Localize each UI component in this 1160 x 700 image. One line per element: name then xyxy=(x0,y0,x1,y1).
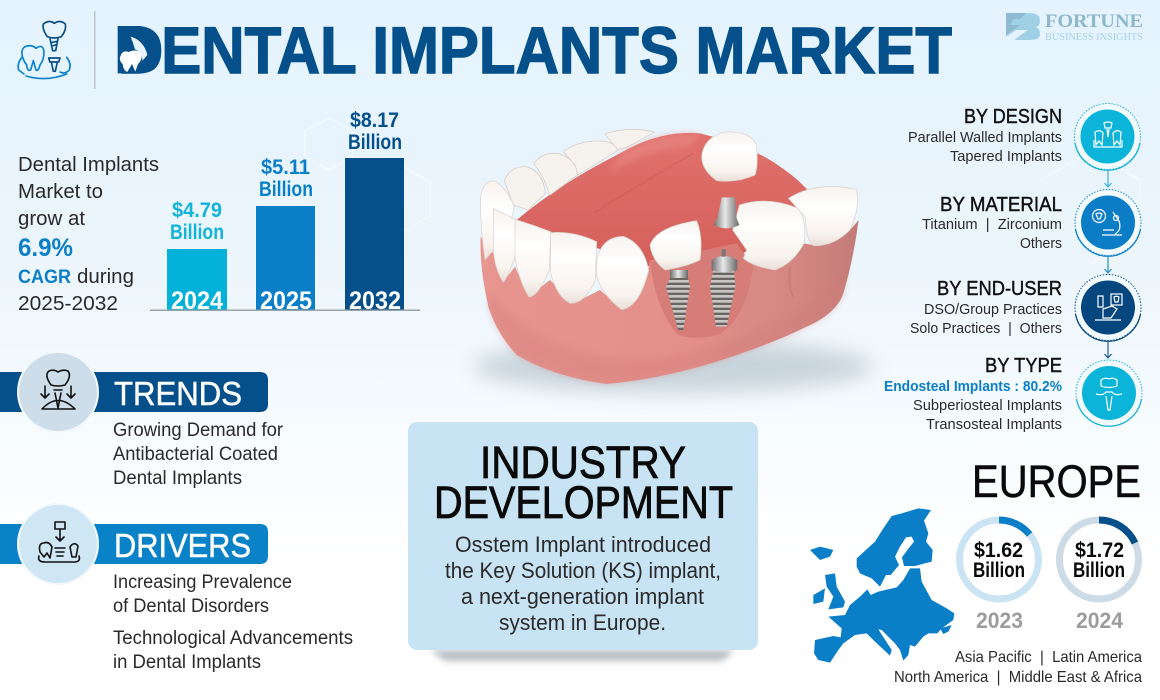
front teeth xyxy=(481,181,857,310)
gums xyxy=(480,220,859,384)
text block: market growth: 2025-2032 xyxy=(18,293,118,315)
panel: trends: Growing Demand for xyxy=(113,420,284,441)
donut: 2024: Billion xyxy=(1073,559,1125,582)
bar 2024: $4.79 xyxy=(172,199,222,222)
bar 2024: Billion xyxy=(170,221,224,244)
text block: market growth: Dental Implants xyxy=(18,154,159,176)
icon: by end-user badge xyxy=(1075,274,1141,341)
bar 2024 xyxy=(167,199,227,315)
bar 2025 xyxy=(256,156,315,315)
text block: market growth: during xyxy=(77,266,134,288)
segment: by material xyxy=(922,194,1062,252)
segment: by material: Titanium | Zirconium xyxy=(922,216,1062,233)
segment: by material: BY MATERIAL xyxy=(940,194,1062,216)
panel: trends xyxy=(0,352,284,489)
right molars xyxy=(788,186,857,246)
panel: drivers: of Dental Disorders xyxy=(113,596,269,617)
arrow xyxy=(1104,170,1112,187)
text block: market growth: CAGR xyxy=(18,267,71,288)
icon: by type badge xyxy=(1076,360,1142,426)
panel: drivers: Increasing Prevalence xyxy=(113,572,292,593)
text block: other regions: Asia Pacific | Latin America xyxy=(955,649,1142,666)
panel: trends: TRENDS xyxy=(114,375,242,412)
panel: drivers: in Dental Implants xyxy=(113,652,261,673)
segment: by end-user: Solo Practices | Others xyxy=(910,320,1062,337)
panel: trends: Antibacterial Coated xyxy=(113,444,278,465)
panel: drivers: DRIVERS xyxy=(114,527,251,564)
text block: other regions xyxy=(894,649,1142,686)
donut: 2023 xyxy=(960,520,1038,633)
title: DENTAL IMPLANTS MARKET xyxy=(118,13,952,87)
segment: by type: BY TYPE xyxy=(985,355,1062,377)
icon: dental implant logo xyxy=(18,21,70,79)
icon: crown on implant xyxy=(18,352,98,432)
bar 2025: 2025 xyxy=(260,287,312,315)
text block: market growth xyxy=(18,154,159,315)
panel: industry development: Osstem Implant introduced xyxy=(455,532,711,557)
segment: by type xyxy=(884,355,1062,433)
donut: 2024: $1.72 xyxy=(1075,539,1124,562)
icon: by design badge xyxy=(1074,104,1140,170)
panel: drivers: Technological Advancements xyxy=(113,628,353,649)
back teeth xyxy=(504,129,655,210)
logo: Fortune Business Insights: BUSINESS INSIGHTS xyxy=(1045,32,1143,43)
map: europe xyxy=(810,508,954,663)
donut: 2023: 2023 xyxy=(976,608,1023,633)
segment: by design: Tapered Implants xyxy=(950,148,1062,165)
text block: market growth: Market to xyxy=(18,181,103,203)
segment: by type: Subperiosteal Implants xyxy=(913,397,1062,414)
bar chart xyxy=(150,109,420,315)
text block: market growth: 6.9% xyxy=(18,234,73,262)
illustration: dental implant jaw xyxy=(473,129,873,393)
arrow xyxy=(1104,256,1112,273)
icon: implant between teeth xyxy=(18,504,98,584)
bar 2032: 2032 xyxy=(349,287,401,315)
segment: by material: Others xyxy=(1020,235,1062,252)
text block: other regions: North America | Middle East & Africa xyxy=(894,669,1142,686)
segment: by type: Transosteal Implants xyxy=(926,416,1062,433)
segment: by end-user: BY END-USER xyxy=(937,278,1062,300)
donut: 2023: $1.62 xyxy=(974,539,1023,562)
panel: industry development: INDUSTRY xyxy=(480,437,686,488)
panel: industry development xyxy=(408,422,758,661)
bar 2025: $5.11 xyxy=(261,156,310,179)
segment: by end-user: DSO/Group Practices xyxy=(924,301,1062,318)
panel: segments xyxy=(884,106,1062,433)
panel: industry development: the Key Solution (KS) implant, xyxy=(445,558,721,583)
donut: 2024 xyxy=(1060,520,1138,633)
logo: Fortune Business Insights xyxy=(1006,11,1143,43)
bar 2025: Billion xyxy=(259,178,313,201)
icon: by material badge xyxy=(1075,190,1141,256)
segment: by design: BY DESIGN xyxy=(964,106,1062,128)
segment: by design xyxy=(908,106,1062,165)
arrow xyxy=(1104,341,1112,358)
logo: Fortune Business Insights: FORTUNE xyxy=(1045,11,1143,32)
heading: europe: EUROPE xyxy=(972,456,1141,507)
panel: trends: Dental Implants xyxy=(113,468,242,489)
left implant xyxy=(666,270,690,330)
bar 2032: $8.17 xyxy=(350,109,399,132)
bar 2032: Billion xyxy=(348,131,402,154)
panel: industry development: a next-generation implant xyxy=(461,584,704,609)
panel: drivers xyxy=(0,504,353,673)
text block: market growth: grow at xyxy=(18,208,85,230)
icon: tooth cut into the letter D xyxy=(118,26,161,73)
segment: by end-user xyxy=(910,278,1062,337)
donut: 2023: Billion xyxy=(973,559,1025,582)
bar 2024: 2024 xyxy=(171,287,223,315)
donut: 2024: 2024 xyxy=(1076,608,1124,633)
panel: industry development: system in Europe. xyxy=(499,610,666,635)
crowns and abutment xyxy=(650,132,757,270)
segment: by design: Parallel Walled Implants xyxy=(908,129,1062,146)
segment: by type: Endosteal Implants : 80.2% xyxy=(884,378,1062,395)
tongue xyxy=(517,133,813,267)
bar 2032 xyxy=(345,109,404,315)
panel: industry development: DEVELOPMENT xyxy=(434,477,733,528)
right implant xyxy=(710,249,737,327)
